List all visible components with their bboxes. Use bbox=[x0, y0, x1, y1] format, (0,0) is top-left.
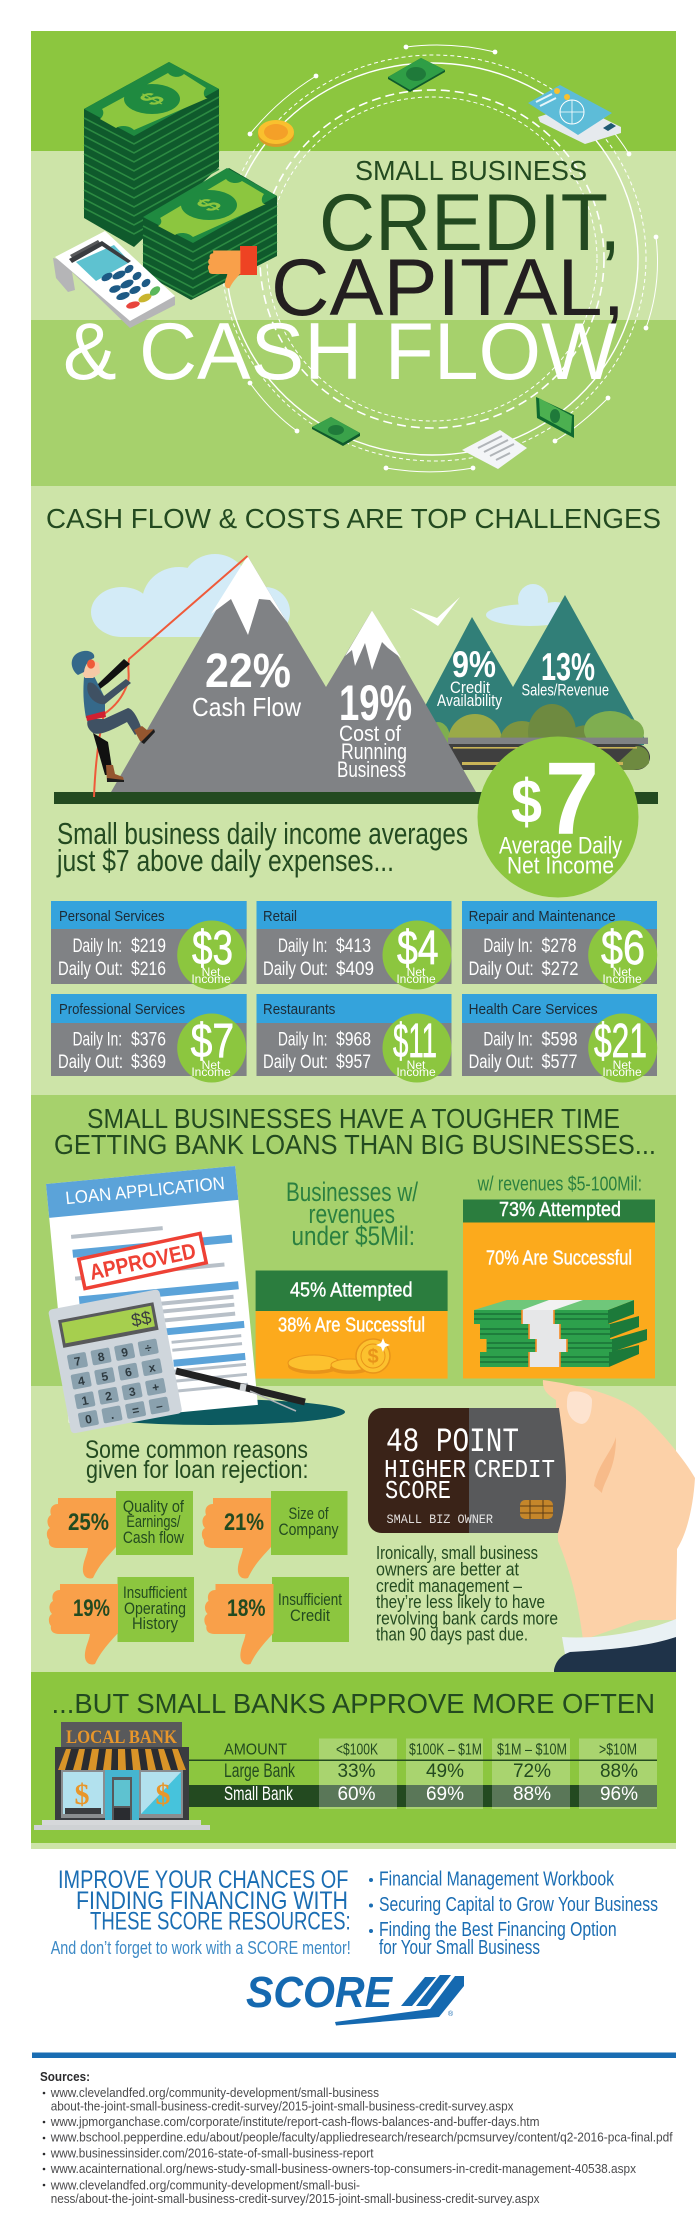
stat: 13% sales/revenue: 13% bbox=[541, 646, 595, 689]
box: $5-100Mil results bbox=[463, 1199, 655, 1378]
reason: 25% quality of earnings: Earnings/ bbox=[126, 1512, 181, 1531]
icon: calculator: 6 bbox=[124, 1365, 133, 1380]
list: score resources bbox=[369, 1869, 658, 1959]
stat: 19% cost of running business: Running bbox=[341, 739, 407, 764]
badge: $7 average daily net income: $ bbox=[511, 768, 542, 837]
icon: thumbs down on red cuff bbox=[208, 246, 257, 288]
card: professional services: Daily Out: bbox=[58, 1052, 123, 1073]
icon: pen bbox=[176, 1371, 305, 1411]
table: approval rates: >$10M bbox=[599, 1742, 637, 1758]
reason: 25% quality of earnings: 25% bbox=[68, 1509, 109, 1536]
text: daily income note: Small business daily income averages bbox=[57, 816, 468, 851]
heading: challenges: CASH FLOW & COSTS ARE TOP CHALLENGES bbox=[46, 503, 661, 534]
icon: calculator: + bbox=[151, 1380, 160, 1395]
icon: calculator: . bbox=[109, 1408, 115, 1422]
callout: improve your chances bbox=[51, 1866, 351, 1958]
icon: climber bbox=[72, 651, 155, 782]
sources: www.jpmorganchase.com/corporate/institute/report-cash-flows-balances-and-buffer-days.htm bbox=[50, 2114, 539, 2129]
icon: gray mountains bbox=[111, 556, 476, 792]
logo: SCORE bbox=[246, 1968, 464, 2026]
icon: banknote bottom left bbox=[312, 417, 360, 446]
text: under $5Mil label: revenues bbox=[308, 1199, 395, 1229]
callout: improve your chances: And don’t forget to work with a SCORE mentor! bbox=[51, 1938, 351, 1958]
card: professional services: Net bbox=[202, 1058, 221, 1072]
title: CAPITAL, bbox=[271, 243, 625, 333]
icon: road bbox=[448, 738, 650, 770]
table: approval rates: AMOUNT bbox=[224, 1742, 287, 1758]
table: approval rates: $1M – $10M bbox=[497, 1742, 567, 1758]
card: restaurants: $957 bbox=[336, 1052, 371, 1073]
icon: loan application form: LOAN APPLICATION bbox=[64, 1173, 226, 1208]
icon: coins bbox=[288, 1338, 390, 1374]
list: score resources: Finding the Best Financing Option bbox=[379, 1919, 617, 1941]
card: repair and maintenance: Income bbox=[602, 972, 642, 986]
stat: 13% sales/revenue: Sales/Revenue bbox=[522, 680, 609, 700]
icon: small money stack bbox=[143, 168, 277, 300]
stat: 9% credit availability: Credit bbox=[450, 678, 490, 697]
text: credit management paragraph bbox=[376, 1543, 558, 1644]
panel: bank loans bbox=[31, 1095, 676, 1386]
icon: credit cards bbox=[528, 85, 621, 144]
icon: calculator: 3 bbox=[128, 1384, 137, 1399]
icon: sleeve bbox=[554, 1619, 676, 1672]
heading: bank loans: GETTING BANK LOANS THAN BIG BUSINESSES... bbox=[54, 1129, 656, 1160]
sources: www.acainternational.org/news-study-small-business-owners-top-consumers-in-credit-management-40538.aspx bbox=[50, 2161, 636, 2176]
text: rejection reasons heading bbox=[85, 1436, 308, 1484]
table: approval rates: $100K – $1M bbox=[409, 1742, 482, 1758]
icon: card chip bbox=[520, 1500, 553, 1519]
card: repair and maintenance: Daily In: bbox=[483, 936, 533, 957]
table: approval rates: <$100K bbox=[336, 1742, 378, 1758]
header band: mid green bbox=[31, 320, 676, 486]
badge: $7 average daily net income bbox=[478, 736, 638, 898]
text: under $5Mil label: Businesses w/ bbox=[286, 1177, 418, 1207]
orbit rings bbox=[222, 45, 658, 472]
card: professional services: Income bbox=[191, 1065, 231, 1079]
stat: 9% credit availability: Availability bbox=[437, 691, 502, 710]
table: approval rates: 33% bbox=[337, 1761, 376, 1782]
icon: cash bundles bbox=[474, 1300, 647, 1367]
card: restaurants: $968 bbox=[336, 1030, 371, 1050]
card: personal services: $216 bbox=[131, 959, 166, 980]
reason: 19% insufficient operating history: Operating bbox=[124, 1599, 186, 1618]
stat: 19% cost of running business: Cost of bbox=[339, 721, 402, 746]
card: restaurants: Restaurants bbox=[263, 1001, 335, 1018]
sources: about-the-joint-small-business-credit-survey/2015-joint-small-business-credit-survey.aspx bbox=[51, 2099, 514, 2114]
table: approval rates: 88% bbox=[513, 1784, 551, 1805]
stat: 9% credit availability: 9% bbox=[452, 644, 496, 685]
table: approval rates bbox=[189, 1738, 657, 1809]
card: retail: Daily In: bbox=[278, 936, 327, 957]
box: under $5Mil results bbox=[256, 1270, 448, 1379]
card: retail: Income bbox=[396, 972, 436, 986]
reason: 21% size of company: Size of bbox=[288, 1504, 329, 1523]
card: repair and maintenance: Net bbox=[613, 965, 632, 979]
card: retail: $4 bbox=[397, 922, 439, 975]
icon: banknote top bbox=[388, 58, 445, 92]
icon: clouds bbox=[91, 554, 574, 637]
sources: www.clevelandfed.org/community-development/small-business bbox=[50, 2085, 379, 2100]
card: personal services: Daily In: bbox=[73, 936, 122, 957]
sources: www.clevelandfed.org/community-development/small-busi- bbox=[50, 2177, 360, 2192]
card: health care services: Health Care Services bbox=[469, 1001, 598, 1018]
title: CREDIT, bbox=[319, 178, 621, 268]
header band: light green bbox=[31, 151, 676, 320]
text: credit management paragraph: revolving bank cards more bbox=[376, 1608, 558, 1628]
stat: 19% cost of running business: Business bbox=[337, 757, 406, 782]
card: personal services: Income bbox=[191, 972, 231, 986]
sources bbox=[40, 2069, 673, 2206]
reason: 18% insufficient credit bbox=[204, 1577, 349, 1664]
reason: 19% insufficient operating history: 19% bbox=[73, 1595, 110, 1622]
icon: calculator: x bbox=[147, 1360, 157, 1375]
table: approval rates: 69% bbox=[426, 1784, 464, 1805]
text: credit management paragraph: Ironically, small business bbox=[376, 1543, 538, 1563]
header band: top green bbox=[31, 31, 676, 151]
text: daily income note: just $7 above daily expenses... bbox=[56, 843, 394, 878]
reason: 21% size of company bbox=[202, 1491, 348, 1578]
text: daily income note bbox=[56, 816, 468, 878]
sources: ness/about-the-joint-small-business-credit-survey/2015-joint-small-business-credit-survey.aspx bbox=[51, 2191, 540, 2206]
panel: small banks bbox=[31, 1672, 676, 1849]
card: retail: Daily Out: bbox=[263, 959, 328, 980]
text: credit management paragraph: credit management – bbox=[376, 1576, 522, 1596]
card: restaurants: Daily In: bbox=[278, 1030, 327, 1050]
card: professional services: Daily In: bbox=[73, 1030, 122, 1050]
icon: calculator: ÷ bbox=[144, 1340, 153, 1356]
icon: calculator: 5 bbox=[100, 1369, 110, 1384]
icon: large money stack: $ bbox=[132, 89, 172, 109]
logo: SCORE: SCORE bbox=[246, 1968, 394, 2017]
icon: calculator: 1 bbox=[80, 1393, 90, 1408]
icon: teal mountains bbox=[424, 595, 644, 745]
card: personal services: Daily Out: bbox=[58, 959, 123, 980]
credit card: 48 point higher credit score: CREDIT bbox=[474, 1455, 555, 1485]
card: restaurants: Income bbox=[396, 1065, 436, 1079]
icon: calculator: $$ bbox=[130, 1307, 153, 1331]
panel: top challenges bbox=[31, 486, 676, 1095]
text: under $5Mil label bbox=[286, 1177, 418, 1251]
card: retail: $409 bbox=[336, 959, 374, 980]
panel: credit management bbox=[31, 1380, 695, 1672]
reason: 19% insufficient operating history: Insufficient bbox=[123, 1583, 187, 1602]
heading: bank loans bbox=[54, 1103, 656, 1160]
callout: improve your chances: THESE SCORE RESOURCES: bbox=[90, 1908, 351, 1936]
logo: SCORE: ® bbox=[448, 2010, 454, 2018]
text: credit management paragraph: owners are better at bbox=[376, 1560, 519, 1580]
table: approval rates: 49% bbox=[426, 1761, 464, 1782]
card: personal services: Net bbox=[202, 965, 221, 979]
card: repair and maintenance: $6 bbox=[601, 922, 645, 975]
icon: calculator: 4 bbox=[77, 1374, 86, 1389]
text: rejection reasons heading: Some common reasons bbox=[85, 1436, 308, 1464]
icon: calculator: 8 bbox=[97, 1349, 106, 1364]
stat: 13% sales/revenue bbox=[522, 646, 609, 700]
title: & CASH FLOW bbox=[63, 307, 618, 397]
reason: 25% quality of earnings: Quality of bbox=[123, 1497, 184, 1516]
rule bbox=[32, 2052, 676, 2058]
card: professional services: $7 bbox=[191, 1015, 234, 1068]
card: health care services: Net bbox=[613, 1058, 632, 1072]
sources: www.businessinsider.com/2016-state-of-small-business-report bbox=[50, 2146, 374, 2161]
heading: small banks: ...BUT SMALL BANKS APPROVE MORE OFTEN bbox=[52, 1688, 655, 1719]
reason: 21% size of company: 21% bbox=[224, 1509, 264, 1536]
rope bbox=[94, 556, 248, 797]
badge: $7 average daily net income: 7 bbox=[545, 741, 599, 856]
heading: bank loans: SMALL BUSINESSES HAVE A TOUGHER TIME bbox=[87, 1103, 620, 1134]
card: professional services: $376 bbox=[131, 1030, 166, 1050]
card: personal services: $3 bbox=[192, 922, 233, 975]
card: restaurants: Net bbox=[407, 1058, 426, 1072]
icon: gold coin bbox=[258, 120, 294, 147]
icon: large money stack bbox=[84, 62, 219, 247]
icon: small money stack: $ bbox=[189, 195, 229, 215]
table: approval rates: Large Bank bbox=[224, 1761, 295, 1782]
card: professional services: $369 bbox=[131, 1052, 166, 1073]
reason: 19% insufficient operating history bbox=[49, 1577, 194, 1664]
table: approval rates: 96% bbox=[600, 1784, 638, 1805]
text: $5-100Mil label: w/ revenues $5-100Mil: bbox=[477, 1174, 642, 1196]
icon: banknote bottom right bbox=[536, 397, 574, 438]
card: health care services: Daily In: bbox=[483, 1030, 533, 1050]
icon: receipt bbox=[462, 430, 527, 469]
table: approval rates: 60% bbox=[337, 1784, 376, 1805]
card: health care services: Daily Out: bbox=[469, 1052, 534, 1073]
table: approval rates: Small Bank bbox=[224, 1784, 293, 1805]
card: restaurants bbox=[256, 994, 452, 1082]
callout: improve your chances: FINDING FINANCING WITH bbox=[76, 1887, 348, 1915]
card: health care services: $577 bbox=[542, 1052, 578, 1073]
stat: 19% cost of running business: 19% bbox=[339, 675, 412, 731]
title bbox=[63, 155, 625, 397]
credit card: 48 point higher credit score: HIGHER bbox=[384, 1455, 466, 1485]
list: score resources: Financial Management Workbook bbox=[379, 1869, 615, 1891]
card: repair and maintenance: Repair and Maintenance bbox=[469, 908, 616, 925]
card: retail: Retail bbox=[263, 908, 297, 925]
icon: calculator bbox=[48, 1289, 182, 1434]
icon: local bank storefront: $ bbox=[74, 1778, 90, 1811]
box: $5-100Mil results: 73% Attempted bbox=[499, 1199, 621, 1221]
stat: 22% cash flow: 22% bbox=[205, 645, 291, 698]
icon: bird bbox=[410, 597, 460, 626]
stat: 22% cash flow: Cash Flow bbox=[192, 692, 301, 722]
credit card: 48 point higher credit score: SCORE bbox=[385, 1476, 451, 1506]
card: repair and maintenance: $272 bbox=[542, 959, 578, 980]
stat: 19% cost of running business bbox=[337, 675, 412, 782]
text: credit management paragraph: than 90 days past due. bbox=[376, 1624, 528, 1644]
icon: local bank storefront: LOCAL BANK bbox=[66, 1727, 177, 1748]
table: approval rates: 88% bbox=[600, 1761, 638, 1782]
card: personal services: $219 bbox=[131, 936, 166, 957]
reason: 21% size of company: Company bbox=[278, 1520, 339, 1539]
credit card: 48 point higher credit score bbox=[368, 1408, 566, 1533]
icon: calculator: 9 bbox=[120, 1345, 130, 1360]
badge: $7 average daily net income: Net Income bbox=[507, 852, 614, 880]
icon: approved stamp: APPROVED bbox=[87, 1238, 198, 1285]
card: professional services bbox=[51, 994, 247, 1082]
stat: 22% cash flow bbox=[192, 645, 301, 722]
reason: 25% quality of earnings bbox=[47, 1491, 193, 1578]
icon: local bank storefront: $ bbox=[156, 1778, 170, 1811]
icon: local bank storefront bbox=[34, 1722, 210, 1830]
card: health care services: $598 bbox=[542, 1030, 578, 1050]
icon: bushes bbox=[426, 704, 644, 768]
card: repair and maintenance bbox=[462, 901, 657, 990]
reason: 19% insufficient operating history: History bbox=[132, 1614, 178, 1633]
card: restaurants: Daily Out: bbox=[263, 1052, 328, 1073]
title: SMALL BUSINESS bbox=[355, 155, 587, 186]
card: personal services: Personal Services bbox=[59, 908, 165, 925]
icon: hand bbox=[543, 1380, 695, 1640]
credit card: 48 point higher credit score: SMALL BIZ OWNER bbox=[386, 1512, 493, 1527]
box: under $5Mil results: 38% Are Successful bbox=[278, 1314, 425, 1336]
reason: 18% insufficient credit: 18% bbox=[227, 1595, 266, 1622]
card: restaurants: $11 bbox=[393, 1015, 437, 1068]
card: personal services bbox=[51, 901, 247, 990]
reason: 18% insufficient credit: Insufficient bbox=[278, 1590, 342, 1609]
icon: loan application form bbox=[46, 1166, 258, 1423]
icon: calculator: 7 bbox=[73, 1354, 82, 1369]
icon: coins: $ bbox=[367, 1346, 379, 1368]
card: health care services bbox=[462, 994, 657, 1082]
ground bar bbox=[54, 792, 658, 804]
card: retail: $413 bbox=[336, 936, 371, 957]
icon: calculator: – bbox=[155, 1398, 164, 1414]
icon: calculator: 0 bbox=[84, 1412, 93, 1427]
card: professional services: Professional Services bbox=[59, 1001, 185, 1018]
card: health care services: $21 bbox=[594, 1015, 647, 1068]
icon: card terminal bbox=[53, 231, 175, 328]
reason: 25% quality of earnings: Cash flow bbox=[123, 1528, 184, 1547]
table: approval rates: 72% bbox=[513, 1761, 551, 1782]
card: health care services: Income bbox=[602, 1065, 642, 1079]
credit card: 48 point higher credit score: 48 POINT bbox=[386, 1424, 519, 1462]
sources: Sources: bbox=[40, 2069, 90, 2084]
reason: 18% insufficient credit: Credit bbox=[290, 1606, 330, 1625]
stat: 9% credit availability bbox=[437, 644, 502, 710]
icon: pen shadow bbox=[75, 1399, 345, 1425]
icon: calculator: 2 bbox=[104, 1389, 113, 1404]
card: repair and maintenance: $278 bbox=[542, 936, 576, 957]
box: $5-100Mil results: 70% Are Successful bbox=[486, 1248, 632, 1270]
card: retail: Net bbox=[407, 965, 426, 979]
card: retail bbox=[256, 901, 452, 990]
text: rejection reasons heading: given for loan rejection: bbox=[86, 1456, 308, 1484]
callout: improve your chances: IMPROVE YOUR CHANCES OF bbox=[58, 1866, 348, 1894]
text: under $5Mil label: under $5Mil: bbox=[292, 1221, 415, 1251]
icon: calculator: = bbox=[131, 1403, 140, 1418]
card: repair and maintenance: Daily Out: bbox=[469, 959, 534, 980]
box: under $5Mil results: 45% Attempted bbox=[290, 1280, 412, 1302]
text: credit management paragraph: they’re less likely to have bbox=[376, 1592, 545, 1612]
list: score resources: for Your Small Business bbox=[379, 1937, 540, 1959]
badge: $7 average daily net income: Average Daily bbox=[499, 832, 622, 860]
